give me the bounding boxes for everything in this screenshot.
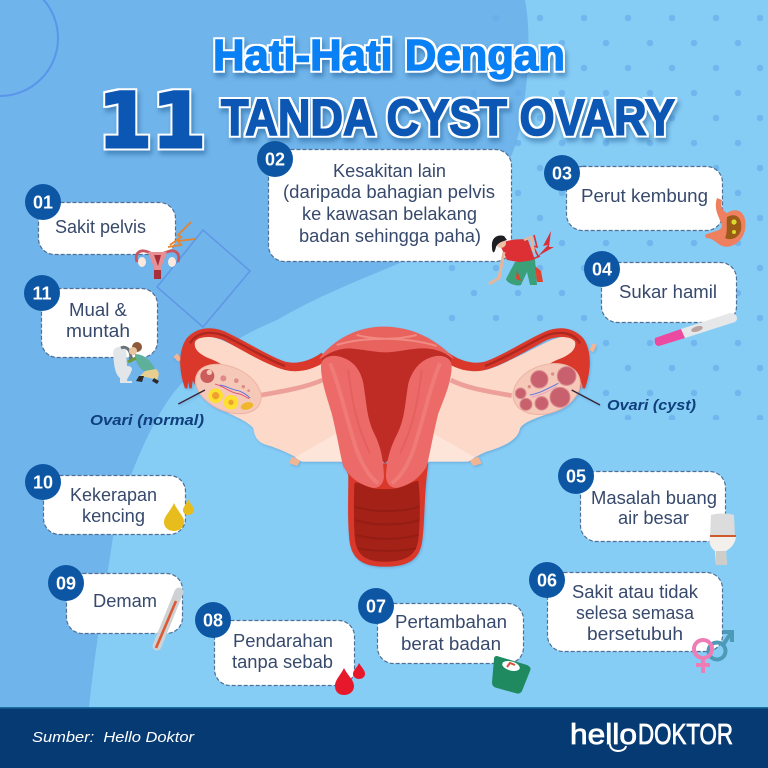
card 06: 06 <box>537 570 557 590</box>
card 09 <box>48 565 182 634</box>
icon: gender symbols <box>694 632 732 673</box>
label: normal ovary: Ovari (normal) <box>90 412 204 429</box>
icon: toilet <box>709 514 736 565</box>
icon: person vomiting at toilet <box>113 342 159 384</box>
icon: urine drops <box>164 499 194 531</box>
card 11: 11 <box>32 284 52 304</box>
card 02: Kesakitan lain <box>333 161 446 181</box>
footer <box>0 707 768 768</box>
card 02 <box>257 141 512 262</box>
card 10: Kekerapan <box>70 485 157 505</box>
card 05 <box>558 458 726 542</box>
card 11: Mual & <box>69 300 127 320</box>
card 10: 10 <box>33 472 53 492</box>
card 02: badan sehingga paha) <box>299 226 481 246</box>
icon: weighing scale <box>492 656 531 694</box>
vaginal canal <box>343 463 428 567</box>
broad ligament <box>195 337 579 462</box>
card 03 <box>544 155 722 230</box>
card 01 <box>25 184 176 254</box>
left uterine wall <box>321 356 384 488</box>
card 09: 09 <box>56 574 76 594</box>
card 03: Perut kembung <box>581 186 708 206</box>
card 05: 05 <box>566 466 586 486</box>
cyst ovary <box>506 355 587 423</box>
uterine cavity <box>322 348 452 463</box>
card 10: kencing <box>82 506 145 526</box>
card 02: ke kawasan belakang <box>302 204 477 224</box>
right fallopian tube <box>443 328 590 388</box>
card 04: 04 <box>592 260 612 280</box>
card 05: air besar <box>618 508 689 528</box>
uterus illustration <box>173 327 600 567</box>
icon: woman with back pain <box>489 231 554 285</box>
card 09: Demam <box>93 591 157 611</box>
logo <box>570 719 733 751</box>
icon: blood drops <box>335 663 365 695</box>
right uterine wall <box>386 356 452 488</box>
card 06 <box>529 562 722 652</box>
icon: thermometer <box>156 592 179 648</box>
card 03: 03 <box>552 164 572 184</box>
card 02: (daripada bahagian pelvis <box>283 182 495 202</box>
icon: pregnancy test <box>655 313 737 346</box>
card 01: 01 <box>33 192 53 212</box>
card 08: 08 <box>203 610 223 630</box>
logo: DOKTOR <box>638 719 733 751</box>
ovary pointer lines <box>178 390 600 405</box>
left fallopian tube <box>180 328 327 388</box>
card 06: Sakit atau tidak <box>572 582 699 602</box>
card 11 <box>24 275 158 358</box>
title <box>98 31 675 165</box>
source: Sumber: Hello Doktor <box>32 729 195 746</box>
card 02: 02 <box>265 150 285 170</box>
card 11: muntah <box>66 321 130 341</box>
card 07: Pertambahan <box>395 612 507 632</box>
card 05: Masalah buang <box>591 488 717 508</box>
card 04 <box>584 251 736 322</box>
card 01: Sakit pelvis <box>55 217 146 237</box>
logo: hello <box>570 719 637 751</box>
card 07 <box>358 588 524 664</box>
ends of ligaments <box>173 343 597 466</box>
card 04: Sukar hamil <box>619 282 717 302</box>
uterus dome <box>319 327 454 358</box>
card 08: tanpa sebab <box>232 652 333 672</box>
title line 2: TANDA CYST OVARY <box>221 89 675 146</box>
card 07: 07 <box>366 596 386 616</box>
icon: stomach <box>705 198 746 247</box>
label: cyst ovary: Ovari (cyst) <box>607 397 696 414</box>
normal ovary <box>188 354 269 424</box>
round ligament light bands <box>295 433 475 462</box>
card 06: bersetubuh <box>587 624 683 644</box>
card 08: Pendarahan <box>233 631 333 651</box>
card 07: berat badan <box>401 634 501 654</box>
card 06: selesa semasa <box>576 603 695 623</box>
card 08 <box>195 602 354 686</box>
title line 1: Hati-Hati Dengan <box>213 31 565 80</box>
icon: small uterus with lightning <box>136 222 195 279</box>
big number 11: 11 <box>98 76 206 165</box>
ovarian ligaments <box>258 380 512 396</box>
card 10 <box>25 464 186 534</box>
